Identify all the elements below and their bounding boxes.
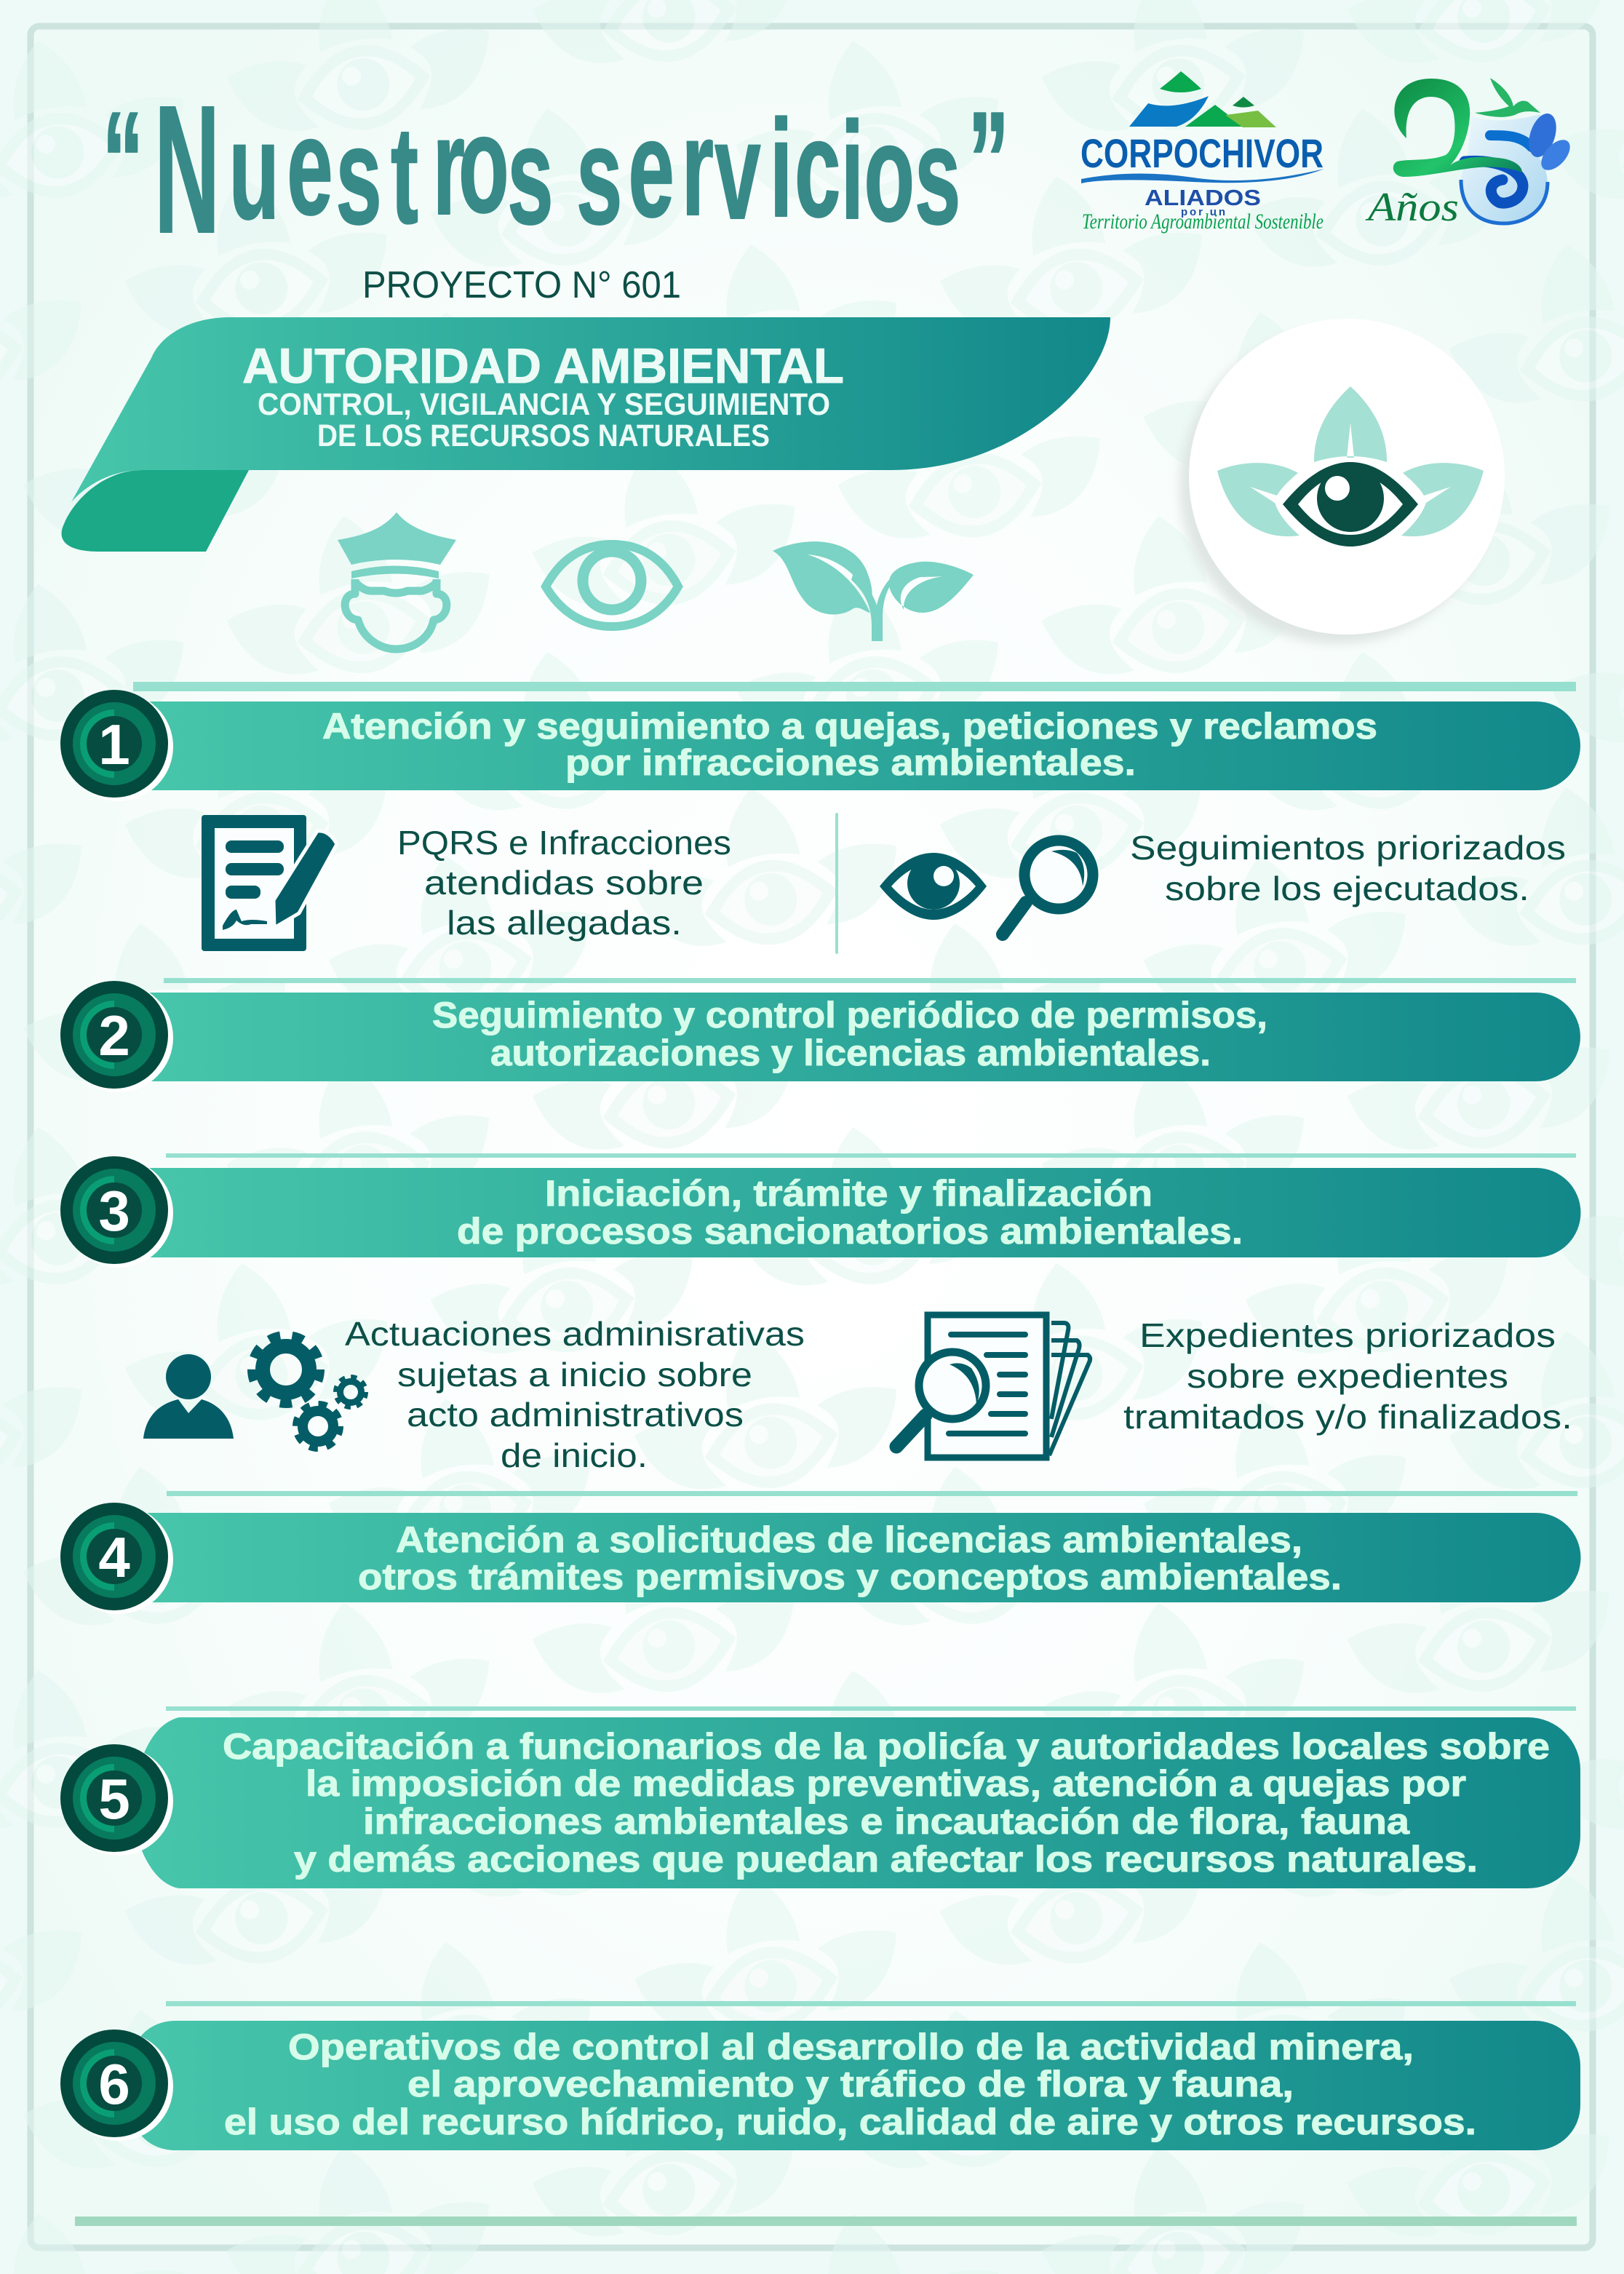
text: actuaciones administrativas: de inicio. <box>501 1436 648 1474</box>
text: actuaciones administrativas <box>345 1315 805 1474</box>
text: expedientes priorizados: sobre expedientes <box>1187 1357 1508 1395</box>
header bar 1 <box>146 701 1580 790</box>
logo: 25 años: Años <box>1365 185 1459 230</box>
header bar 3: Iniciación, trámite y finalización <box>545 1173 1153 1214</box>
header bar 1: Atención y seguimiento a quejas, peticiones y reclamos <box>322 706 1377 747</box>
header bar 2: autorizaciones y licencias ambientales. <box>490 1033 1211 1073</box>
ribbon: Autoridad Ambiental: CONTROL, VIGILANCIA Y SEGUIMIENTO <box>258 387 830 422</box>
text: PQRS e infracciones: atendidas sobre <box>424 864 704 902</box>
badge 4 <box>60 1503 173 1614</box>
header bar 2 <box>146 993 1580 1081</box>
text: actuaciones administrativas: Actuaciones adminisrativas <box>345 1315 805 1353</box>
ribbon: Autoridad Ambiental <box>62 317 1110 552</box>
title: “ <box>102 84 143 238</box>
text: expedientes priorizados: Expedientes priorizados <box>1139 1316 1556 1354</box>
text: PQRS e infracciones: las allegadas. <box>447 904 682 942</box>
project number: PROYECTO N° 601 <box>362 264 681 306</box>
header bar 1: por infracciones ambientales. <box>565 742 1136 783</box>
header bar 5: infracciones ambientales e incautación de flora, fauna <box>363 1801 1410 1842</box>
header bar 5: Capacitación a funcionarios de la policía y autoridades locales sobre <box>223 1726 1550 1767</box>
divider rule 5 <box>166 1706 1576 1711</box>
header bar 5 <box>138 1717 1580 1888</box>
divider rule 2 <box>164 978 1576 983</box>
bottom rule <box>75 2217 1577 2226</box>
text: seguimientos priorizados <box>1130 829 1566 907</box>
header bar 3: de procesos sancionatorios ambientales. <box>457 1211 1243 1252</box>
ribbon: Autoridad Ambiental: DE LOS RECURSOS NATURALES <box>317 418 770 453</box>
icon: plant sprout <box>773 541 974 641</box>
header bar 6: Operativos de control al desarrollo de la actividad minera, <box>288 2027 1414 2067</box>
logo: Corpochivor: por un <box>1181 206 1225 218</box>
badge 5: 5 <box>98 1767 130 1831</box>
icon: eye and magnifier <box>880 840 1093 934</box>
badge 3 <box>60 1156 173 1268</box>
badge 6 <box>60 2029 173 2141</box>
badge 5 <box>60 1744 173 1856</box>
text: actuaciones administrativas: sujetas a inicio sobre <box>397 1356 752 1394</box>
divider rule 3 <box>166 1153 1576 1158</box>
text: expedientes priorizados: tramitados y/o finalizados. <box>1123 1398 1572 1436</box>
logo: Corpochivor <box>1080 71 1324 234</box>
badge 2 <box>60 981 173 1092</box>
badge 2: 2 <box>98 1003 130 1068</box>
title: uestros servicios” <box>228 84 1009 253</box>
header bar 3 <box>146 1168 1580 1257</box>
vertical divider <box>835 813 838 954</box>
icon: person with gears <box>143 1335 366 1449</box>
badge 3: 3 <box>98 1179 130 1243</box>
text: seguimientos priorizados: Seguimientos priorizados <box>1130 829 1566 867</box>
header bar 6 <box>135 2021 1580 2150</box>
text: actuaciones administrativas: acto administrativos <box>407 1396 744 1434</box>
logo: 25 años <box>1365 78 1575 230</box>
header bar 6: el uso del recurso hídrico, ruido, calidad de aire y otros recursos. <box>224 2102 1476 2142</box>
badge 6: 6 <box>98 2052 130 2116</box>
header bar 4 <box>146 1513 1580 1602</box>
header bar 5: la imposición de medidas preventivas, atención a quejas por <box>306 1763 1466 1804</box>
header bar 5: y demás acciones que puedan afectar los recursos naturales. <box>294 1839 1478 1880</box>
icon: eye with leaves <box>1217 386 1484 546</box>
icon: documents with magnifier <box>896 1315 1090 1458</box>
header bar 2: Seguimiento y control periódico de permisos, <box>432 995 1267 1035</box>
logo: Corpochivor: ALIADOS <box>1145 185 1261 210</box>
text: seguimientos priorizados: sobre los ejecutados. <box>1165 870 1529 907</box>
icon: police officer <box>338 512 456 649</box>
text: PQRS e infracciones <box>397 824 731 942</box>
header bar 6: el aprovechamiento y tráfico de flora y fauna, <box>407 2064 1294 2104</box>
logo: Corpochivor: Territorio Agroambiental Sostenible <box>1082 210 1324 234</box>
text: expedientes priorizados <box>1123 1316 1572 1436</box>
badge 1 <box>60 690 173 801</box>
badge 1: 1 <box>98 712 130 776</box>
icon: eye outline <box>546 544 678 627</box>
badge 4: 4 <box>98 1525 130 1589</box>
white circle emblem <box>1179 319 1505 644</box>
divider rule 4 <box>167 1491 1577 1496</box>
divider rule 6 <box>166 2001 1576 2006</box>
icon: signed document <box>202 815 337 951</box>
divider rule 1 <box>133 682 1576 691</box>
text: PQRS e infracciones: PQRS e Infracciones <box>397 824 731 862</box>
ribbon: Autoridad Ambiental: AUTORIDAD AMBIENTAL <box>242 338 844 394</box>
title: N <box>154 68 220 271</box>
header bar 4: otros trámites permisivos y conceptos ambientales. <box>358 1557 1342 1597</box>
header bar 4: Atención a solicitudes de licencias ambientales, <box>396 1519 1302 1560</box>
logo: Corpochivor: CORPOCHIVOR <box>1080 130 1324 176</box>
